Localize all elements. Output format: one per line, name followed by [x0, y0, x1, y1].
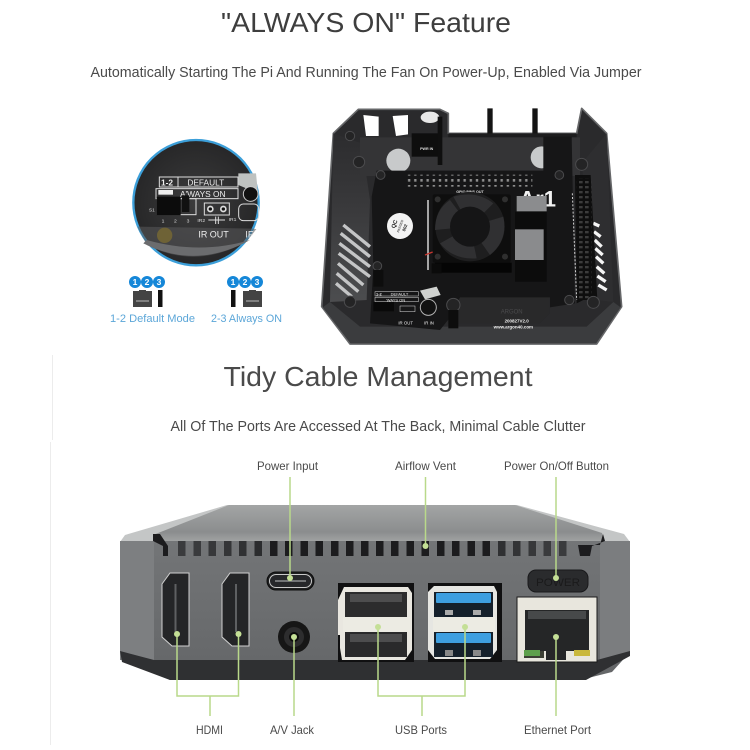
jumper legend: 2-3 always on: 2 [243, 277, 248, 287]
jumper and IR labels on board: IR OUT [398, 321, 413, 326]
subtitle: cable description: All Of The Ports Are Accessed At The Back, Minimal Cable Clutter [170, 419, 586, 435]
port labels [196, 459, 609, 737]
photo: open case interior: PWR IN [420, 147, 434, 151]
power button [528, 570, 588, 592]
circular close-up of jumper: IR OUT [198, 229, 229, 239]
board version text: 200827V2.0 [505, 318, 529, 323]
fan [433, 192, 512, 273]
circular close-up of jumper [133, 140, 259, 265]
rear wall openings [363, 115, 379, 136]
panel: jumper magnifier and modes [110, 140, 282, 325]
title: ALWAYS ON feature: "ALWAYS ON" Feature [221, 7, 511, 38]
logo fragment: Ar1 [519, 187, 556, 212]
bottom rim [323, 302, 621, 343]
leader: airflow vent [424, 477, 426, 546]
QC sticker: QC [391, 219, 400, 229]
HDMI port 1 [162, 573, 189, 646]
circular close-up of jumper: IR1 [229, 217, 237, 223]
circular close-up of jumper: 1-2 [161, 177, 173, 187]
USB 2 stack [338, 583, 414, 662]
leader: power input [289, 477, 291, 578]
label: A/V jack: A/V Jack [270, 723, 315, 737]
circular close-up of jumper: IR2 [197, 218, 205, 224]
case front [120, 541, 630, 680]
label: ethernet port: Ethernet Port [524, 723, 592, 737]
leader: ethernet [555, 637, 557, 716]
leader: HDMI bracket [177, 634, 238, 716]
title: tidy cable management: Tidy Cable Management [224, 361, 533, 392]
jumper legend: 1-2 default mode: 1-2 Default Mode [110, 313, 195, 325]
leader dots [174, 543, 559, 640]
label: airflow vent: Airflow Vent [395, 459, 457, 473]
label: power input: Power Input [257, 459, 319, 473]
heatsink blocks [517, 196, 547, 211]
jumper legend: 1-2 default mode: 3 [157, 277, 162, 287]
label: power button: Power On/Off Button [504, 459, 609, 473]
subtitle: always on description: Automatically Starting The Pi And Running The Fan On Power-Up, Enabled Via Jumper [90, 65, 642, 81]
leader: power button [555, 477, 557, 578]
circular close-up of jumper: 2 [174, 219, 177, 225]
jumper and IR labels on board: IR IN [424, 321, 434, 326]
case lid panel [153, 505, 604, 541]
label: HDMI: HDMI [196, 723, 223, 737]
right vents [593, 223, 607, 290]
photo: open case interior [322, 108, 622, 344]
screws and standoffs [344, 131, 599, 312]
A/V jack [278, 621, 310, 653]
circular close-up of jumper: 1 [162, 219, 165, 225]
GPIO pins [407, 175, 532, 187]
jumper legend: 2-3 always on [211, 276, 282, 325]
HDMI port 2 [222, 573, 249, 646]
left vents [336, 225, 370, 297]
photo: open case interior: GPIO PINS OUT [456, 190, 484, 194]
jumper legend: 1-2 default mode: 2 [145, 277, 150, 287]
photo: open case interior: www.argon40.com [493, 324, 533, 329]
leader: A/V jack [293, 637, 295, 716]
QC sticker: PASSED [396, 219, 405, 233]
jumper legend: 2-3 always on: 3 [255, 277, 260, 287]
vent slots [153, 534, 605, 556]
QC sticker: 802 [401, 223, 409, 232]
circular close-up of jumper: S1 [149, 207, 155, 212]
decorative faint page lines [50, 355, 52, 745]
circular close-up of jumper: IF [245, 229, 254, 239]
circular close-up of jumper: A'WAYS ON [180, 189, 226, 199]
case lid outer edge [120, 505, 630, 542]
label: USB ports: USB Ports [395, 723, 447, 737]
power button: POWER [536, 577, 580, 589]
USB-C port [267, 572, 314, 590]
USB 3 stack [428, 583, 502, 662]
dark bottom band [120, 651, 630, 680]
jumper legend: 2-3 always on: 1 [231, 277, 236, 287]
photo: case rear with ports [120, 505, 630, 680]
circular close-up of jumper: DEFAULT [187, 178, 224, 188]
jumper and IR labels on board: 1-2 [376, 291, 383, 296]
jumper legend: 1-2 default mode [110, 276, 195, 325]
jumper legend: 2-3 always on: 2-3 Always ON [211, 313, 282, 325]
circuit board [370, 137, 575, 330]
jumper and IR labels on board: DEFAULT [391, 291, 409, 296]
ethernet port [517, 597, 597, 662]
jumper and IR labels on board: 'WAYS ON [386, 297, 405, 302]
circular close-up of jumper: 3 [187, 219, 190, 225]
leader lines and dots [174, 477, 559, 716]
QC sticker [383, 209, 417, 243]
jumper and IR labels on board [373, 287, 441, 326]
right GPIO connector [575, 175, 597, 303]
jumper legend: 1-2 default mode: 1 [133, 277, 138, 287]
embossed argon logo: ARGON [501, 309, 523, 315]
case shell [322, 108, 622, 344]
leader: USB bracket [378, 627, 465, 716]
